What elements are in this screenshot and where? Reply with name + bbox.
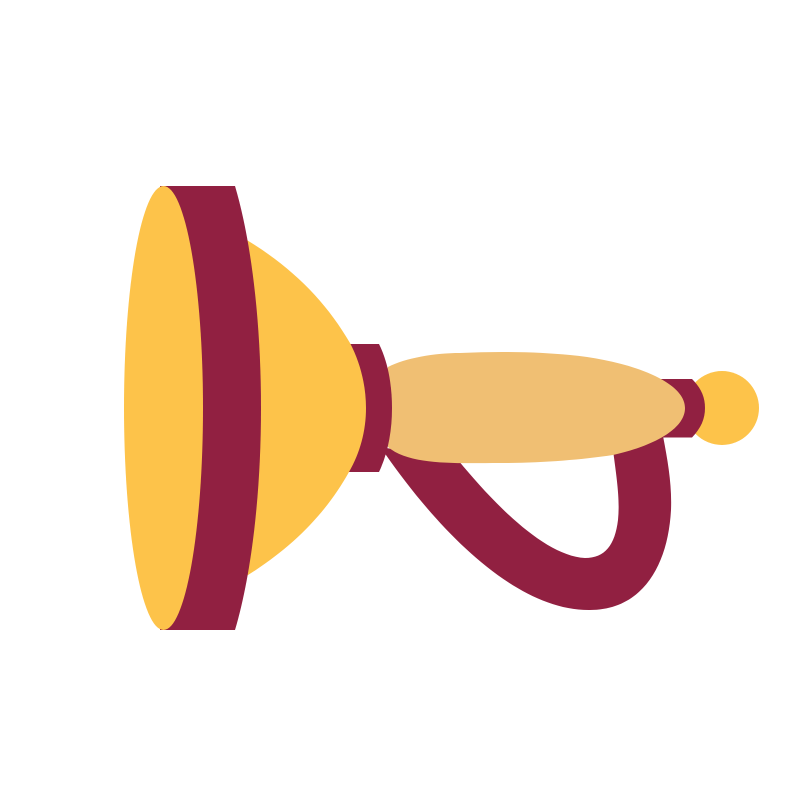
icon: curved tube loop	[380, 436, 671, 610]
icon: bell opening	[124, 186, 203, 630]
icon: bell cone	[240, 236, 366, 580]
icon: mouthpiece stem	[640, 379, 705, 438]
icon: bell rim band	[160, 186, 261, 630]
icon: mouthpiece ball	[685, 371, 759, 445]
icon: bell collar	[340, 344, 392, 472]
icon: tube body	[375, 352, 685, 463]
